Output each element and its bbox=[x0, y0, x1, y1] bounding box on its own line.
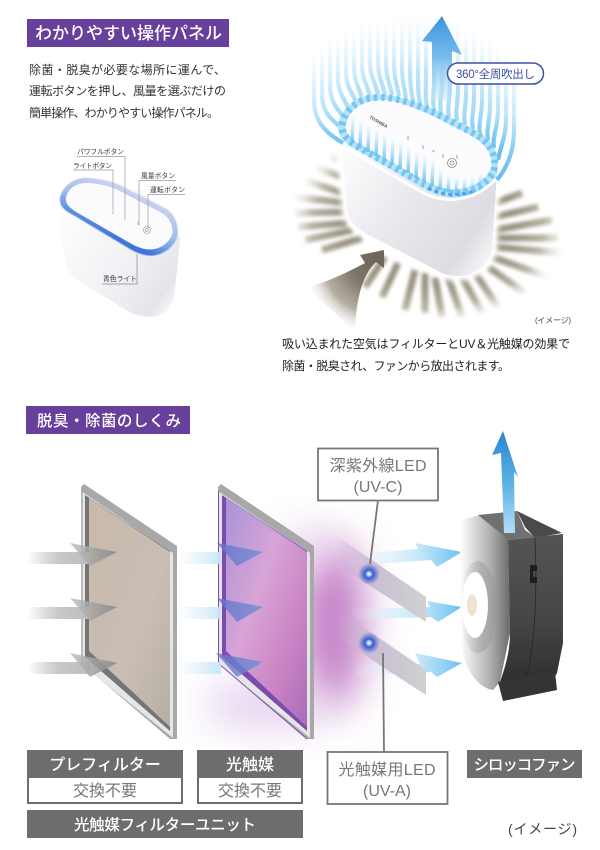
LED UV-C glow bbox=[358, 563, 380, 585]
text block: air flow description: 吸い込まれた空気はフィルターとUV＆光触媒の効果で bbox=[282, 336, 570, 351]
heading: easy control panel bbox=[27, 19, 229, 47]
label: light button bbox=[73, 161, 113, 210]
fan housing lid bbox=[517, 511, 562, 538]
callout: UV-C LED bbox=[318, 448, 438, 564]
product: small purifier with control labels bbox=[60, 147, 185, 317]
label: photocatalyst bbox=[197, 750, 303, 804]
fan hub bbox=[467, 594, 477, 616]
fan housing bbox=[500, 534, 563, 682]
label: sirocco fan: シロッコファン bbox=[474, 757, 576, 774]
white rim of body bbox=[343, 147, 496, 199]
heading: easy control panel: わかりやすい操作パネル bbox=[35, 24, 222, 43]
label: powerful button: パワフルボタン bbox=[77, 147, 124, 156]
photocatalyst filter panel bbox=[218, 484, 314, 739]
white halo fading the rays near body bbox=[342, 147, 495, 276]
image note: (イメージ) bbox=[535, 316, 571, 325]
text block: air flow description: 除菌・脱臭され、ファンから放出されます。 bbox=[282, 358, 510, 373]
text block: panel description bbox=[29, 62, 226, 120]
label: photocatalyst filter unit: 光触媒フィルターユニット bbox=[74, 816, 256, 834]
up arrow bbox=[422, 16, 462, 100]
fan housing seam bbox=[526, 538, 536, 678]
label: photocatalyst: 交換不要 bbox=[218, 782, 282, 800]
fan disc bbox=[462, 572, 488, 638]
brand mark: TOSHIBA bbox=[368, 115, 389, 129]
LED strip lower bbox=[335, 608, 426, 695]
intake arrow bbox=[306, 250, 384, 332]
callout: UV-A LED: 光触媒用LED bbox=[338, 761, 436, 779]
heading: deodorizing and sterilizing mechanism bbox=[26, 406, 190, 434]
air arrows to fan bbox=[352, 543, 462, 677]
illustration: air flow around purifier bbox=[295, 16, 562, 332]
frame bbox=[218, 484, 314, 739]
text block: panel description: 運転ボタンを押し、風量を選ぶだけの bbox=[29, 84, 226, 98]
callout: UV-A LED: (UV-A) bbox=[363, 783, 411, 800]
rising air stripes bbox=[314, 20, 514, 180]
arrow 1 bbox=[28, 543, 117, 566]
filter mesh bbox=[222, 495, 307, 731]
label: operation button: 運転ボタン bbox=[150, 185, 185, 194]
fan foot bbox=[498, 672, 557, 701]
label: pre-filter: 交換不要 bbox=[73, 782, 137, 800]
label: photocatalyst filter unit bbox=[27, 810, 303, 838]
top panel bbox=[66, 183, 173, 249]
callout: UV-A LED bbox=[328, 653, 448, 804]
image note: (イメージ) bbox=[508, 821, 577, 837]
label: photocatalyst: 光触媒 bbox=[226, 756, 274, 774]
arrow 3 bbox=[181, 653, 263, 677]
filtered air arrows: blue row bbox=[181, 543, 263, 677]
intake rays bbox=[295, 152, 562, 317]
label: sirocco fan bbox=[467, 750, 582, 778]
label: air volume button: 風量ボタン bbox=[141, 171, 175, 180]
light blue rim bbox=[338, 95, 498, 198]
fan side face bbox=[460, 512, 515, 690]
fan inner opening bbox=[478, 511, 535, 540]
arrow 2 bbox=[181, 598, 263, 622]
arrow 1 bbox=[181, 543, 263, 566]
intake air arrows: grey row bbox=[28, 543, 117, 677]
fan disc surround bbox=[459, 561, 497, 653]
filter mesh bbox=[85, 495, 170, 731]
label: powerful button bbox=[77, 147, 125, 217]
frame bbox=[81, 484, 177, 739]
blue light ring bbox=[60, 178, 178, 256]
LED UV-A glow bbox=[358, 632, 380, 654]
arrow 3 bbox=[28, 653, 117, 677]
purifier body bbox=[60, 190, 180, 317]
text block: panel description: 簡単操作、わかりやすい操作パネル。 bbox=[29, 105, 219, 120]
sirocco fan bbox=[459, 511, 563, 701]
label: operation button bbox=[148, 185, 185, 228]
panel buttons bbox=[113, 211, 150, 234]
arrow 2 bbox=[352, 601, 462, 622]
text block: air flow description bbox=[282, 336, 570, 373]
label: pre-filter bbox=[27, 750, 183, 804]
heading: deodorizing and sterilizing mechanism: 脱臭・除菌のしくみ bbox=[37, 411, 181, 430]
badge: 360 degree blow: 360°全周吹出し bbox=[456, 67, 535, 81]
pre-filter panel bbox=[81, 484, 177, 739]
purple UV glow bbox=[203, 523, 365, 729]
top panel bbox=[346, 100, 492, 189]
fan side latch bbox=[530, 565, 537, 583]
arrow 2 bbox=[28, 598, 117, 621]
striped ring over rim bbox=[342, 97, 495, 194]
callout: UV-C LED: 深紫外線LED bbox=[330, 457, 426, 475]
text block: panel description: 除菌・脱臭が必要な場所に運んで、 bbox=[29, 62, 226, 77]
arrow 3 bbox=[355, 653, 462, 677]
purifier body bbox=[340, 130, 497, 276]
label: blue light bbox=[102, 254, 137, 284]
arrow 1 bbox=[370, 543, 462, 567]
label: blue light: 青色ライト bbox=[103, 274, 137, 283]
callout: UV-C LED: (UV-C) bbox=[354, 479, 402, 496]
badge: 360 degree blow bbox=[448, 63, 544, 84]
LED strip upper bbox=[335, 535, 426, 622]
arrow up from fan bbox=[492, 431, 518, 533]
label: light button: ライトボタン bbox=[73, 161, 112, 170]
dark blue inner accent bbox=[428, 188, 474, 195]
buttons on panel bbox=[408, 136, 457, 168]
label: air volume button bbox=[139, 171, 176, 225]
front stripes over panel bbox=[352, 115, 481, 195]
label: pre-filter: プレフィルター bbox=[49, 756, 161, 774]
